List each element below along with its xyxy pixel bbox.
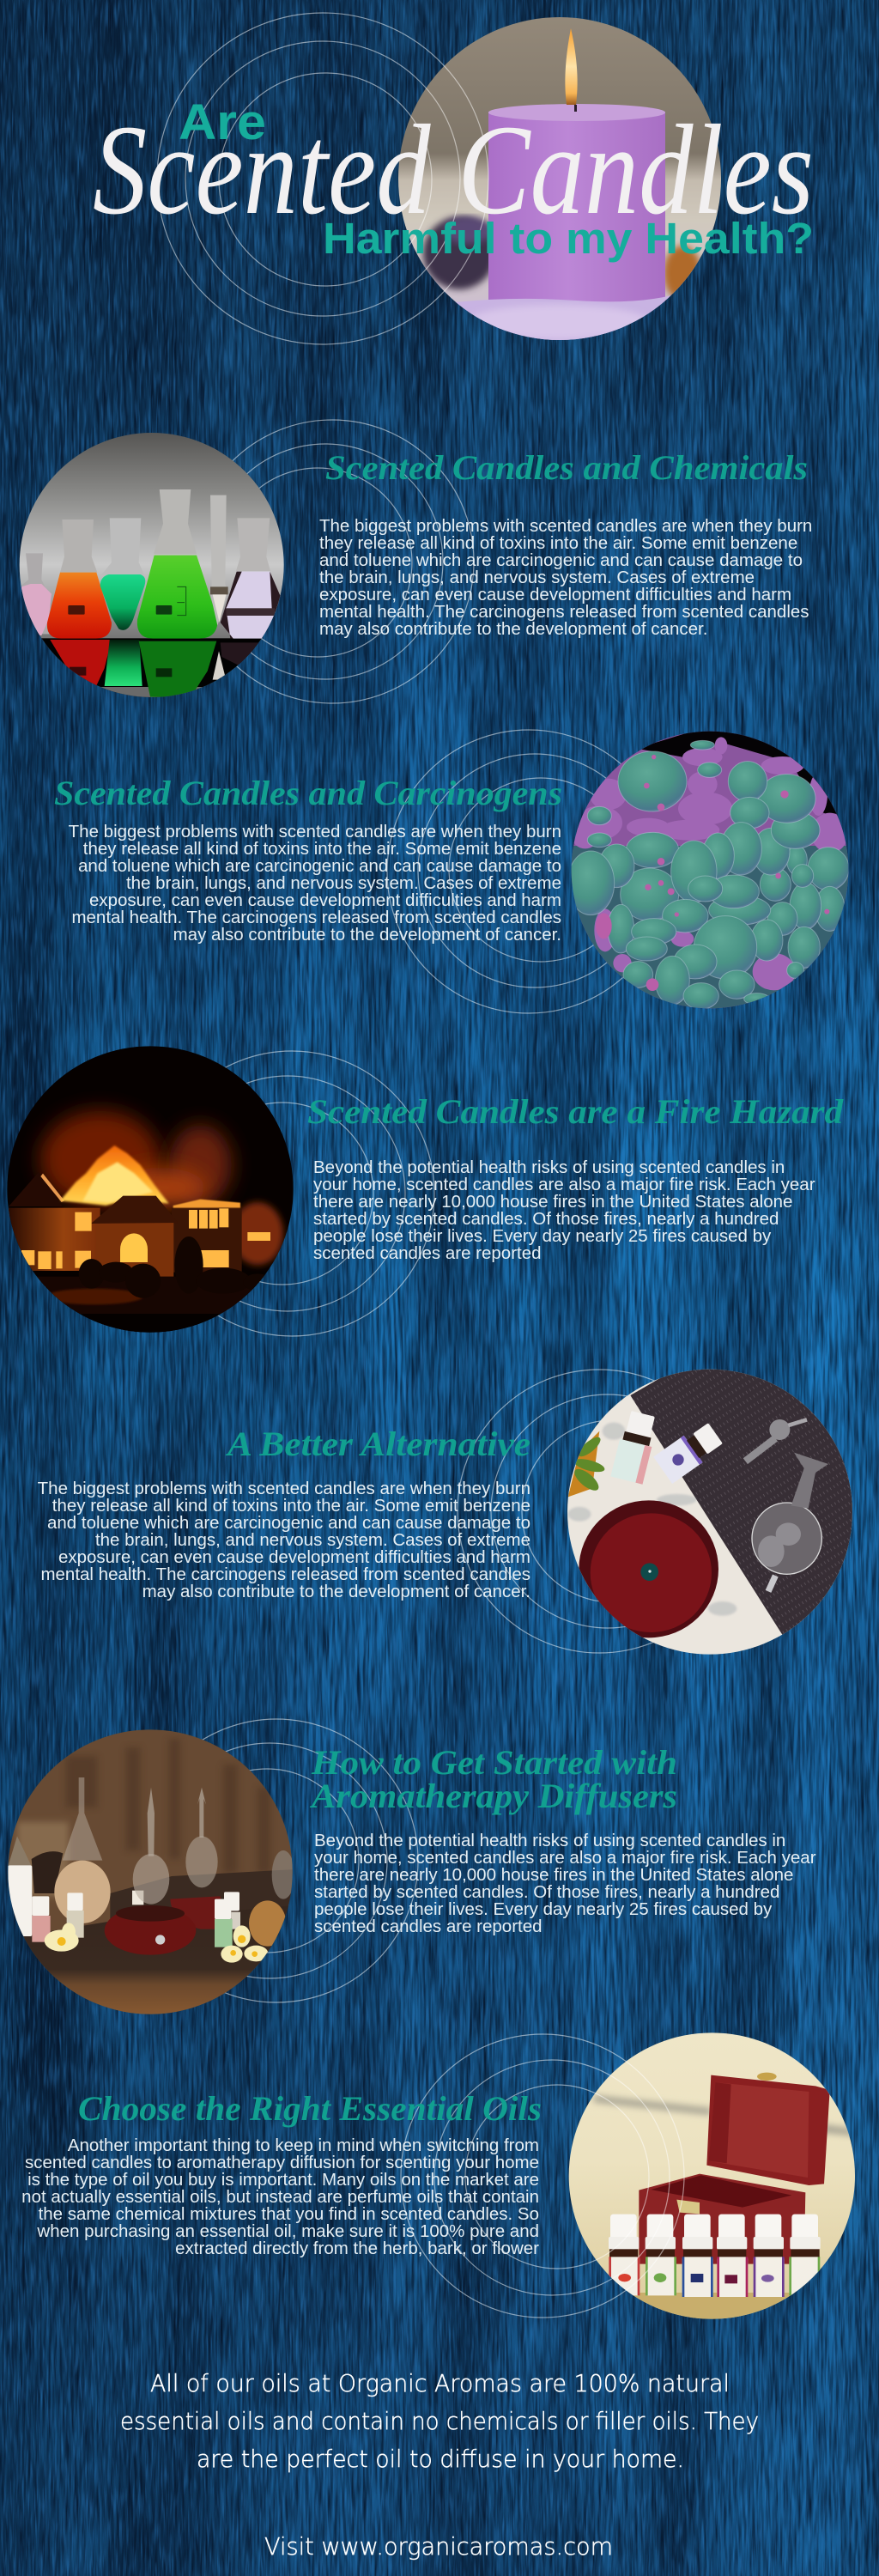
rings (149, 1051, 434, 1336)
body text: people lose their lives. Every day nearly 25 fires caused by (314, 1899, 773, 1919)
body text: started by scented candles. Of those fires, nearly a hundred (314, 1882, 779, 1902)
body text: they release all kind of toxins into the air. Some emit benzene (52, 1496, 530, 1516)
concentric rings (157, 13, 488, 344)
panel: fire hazard (0, 1039, 844, 1340)
body text: not actually essential oils, but instead are perfume oils that contain (21, 2187, 539, 2207)
panel: chemicals (13, 420, 812, 704)
closing statement: essential oils and contain no chemicals or filler oils. They (120, 2407, 759, 2435)
body text: mental health. The carcinogens released from scented candles (40, 1564, 530, 1584)
closing statement (120, 2369, 759, 2473)
body text: your home, scented candles are also a major fire risk. Each year (314, 1848, 816, 1868)
heading: A Better Alternative (225, 1425, 530, 1463)
rings (401, 2034, 684, 2318)
body text: scented candles to aromatherapy diffusion for scenting your home (25, 2153, 539, 2172)
body text: Beyond the potential health risks of using scented candles in (313, 1157, 785, 1177)
body text: they release all kind of toxins into the air. Some emit benzene (83, 839, 561, 859)
body text: the brain, lungs, and nervous system. Cases of extreme (319, 568, 755, 587)
rings (387, 730, 670, 1013)
heading: How to Get Started with (311, 1743, 677, 1782)
body text: your home, scented candles are also a major fire risk. Each year (313, 1175, 815, 1194)
rings (135, 1719, 418, 2002)
heading: Choose the Right Essential Oils (78, 2089, 542, 2128)
body text: the brain, lungs, and nervous system. Cases of extreme (126, 873, 561, 893)
body text: and toluene which are carcinogenic and can cause damage to (319, 550, 803, 570)
body text: they release all kind of toxins into the air. Some emit benzene (319, 533, 797, 553)
heading: Scented Candles and Chemicals (325, 448, 808, 487)
closing statement: are the perfect oil to diffuse in your home. (197, 2445, 684, 2473)
body text: the brain, lungs, and nervous system. Cases of extreme (95, 1530, 530, 1550)
panel: getting started (0, 1719, 816, 2022)
body text: may also contribute to the development of cancer. (142, 1582, 530, 1601)
photo: cancer cells (562, 726, 854, 1018)
body text: mental health. The carcinogens released from scented candles (319, 602, 809, 622)
photo: aromatherapy diffusers on table (8, 1729, 293, 2014)
body text: extracted directly from the herb, bark, or flower (175, 2239, 539, 2258)
body text: Beyond the potential health risks of using scented candles in (314, 1831, 785, 1850)
body text: scented candles are reported (313, 1243, 542, 1263)
title: Are: Are (179, 94, 266, 150)
body text: The biggest problems with scented candles are when they burn (38, 1479, 530, 1498)
body text: people lose their lives. Every day nearly 25 fires caused by (313, 1226, 772, 1246)
website link: Visit www.organicaromas.com (264, 2532, 613, 2561)
header panel (93, 13, 814, 348)
body text: and toluene which are carcinogenic and can cause damage to (78, 856, 561, 876)
body text: The biggest problems with scented candles are when they burn (319, 516, 812, 536)
photo: diffuser flat lay (562, 1365, 858, 1662)
rings (191, 420, 474, 703)
rings (458, 1370, 741, 1653)
body text: is the type of oil you buy is important. Many oils on the market are (27, 2170, 539, 2190)
body text: may also contribute to the development of cancer. (173, 925, 561, 945)
panel: essential oils (21, 2026, 861, 2325)
body text: there are nearly 10,000 house fires in the United States alone (314, 1865, 793, 1885)
photo: essential oil box (562, 2026, 861, 2325)
body text: Another important thing to keep in mind when switching from (68, 2136, 539, 2155)
body text: there are nearly 10,000 house fires in the United States alone (313, 1192, 792, 1212)
heading: Aromatherapy Diffusers (309, 1777, 677, 1815)
panel: carcinogens (54, 726, 854, 1018)
photo: purple candle (395, 13, 730, 348)
heading: Scented Candles are a Fire Hazard (307, 1092, 844, 1131)
body text: the same chemical mixtures that you find in scented candles. So (39, 2204, 539, 2224)
body text: scented candles are reported (314, 1917, 543, 1936)
body text: exposure, can even cause development difficulties and harm (58, 1547, 530, 1567)
body text: The biggest problems with scented candles are when they burn (69, 822, 561, 841)
heading (309, 1743, 677, 1815)
body text: exposure, can even cause development difficulties and harm (89, 890, 561, 910)
body text: mental health. The carcinogens released from scented candles (71, 908, 561, 927)
body text: exposure, can even cause development difficulties and harm (319, 585, 791, 605)
panel: better alternative (38, 1365, 858, 1662)
body text: when purchasing an essential oil, make sure it is 100% pure and (36, 2221, 539, 2241)
body text: and toluene which are carcinogenic and can cause damage to (47, 1513, 530, 1533)
photo: burning house (0, 1039, 300, 1340)
photo: chemical flasks (19, 433, 284, 697)
title: Harmful to my Health?: Harmful to my Health? (323, 214, 814, 263)
heading: Scented Candles and Carcinogens (54, 774, 562, 812)
body text: may also contribute to the development of cancer. (319, 619, 707, 639)
closing statement: All of our oils at Organic Aromas are 100% natural (150, 2369, 730, 2397)
body text: started by scented candles. Of those fires, nearly a hundred (313, 1209, 779, 1229)
